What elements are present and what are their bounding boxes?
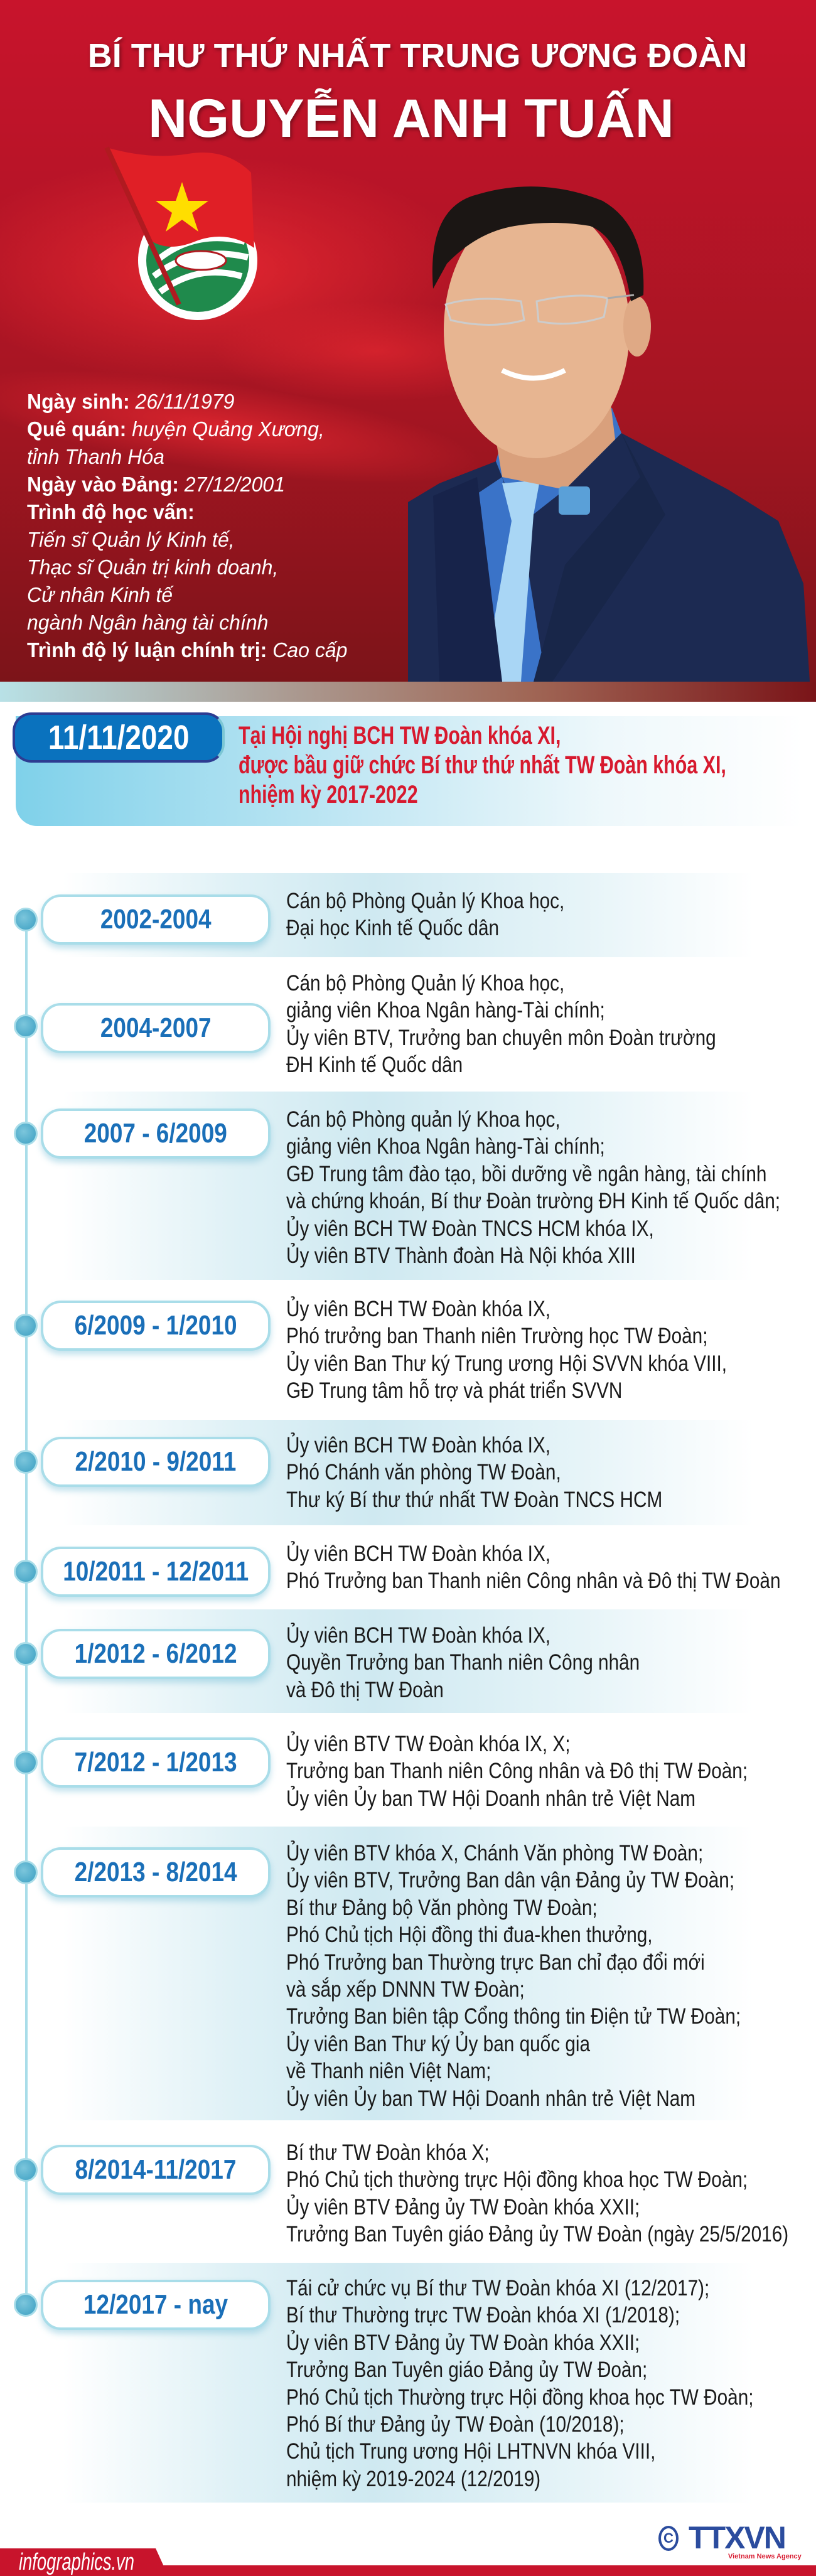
timeline entry 2/2013 - 8/2014: 2/2013 - 8/2014 <box>75 1857 237 1887</box>
timeline entry 2/2013 - 8/2014: Ủy viên BTV, Trưởng Ban dân vận Đảng ủy TW Đoàn; <box>286 1868 734 1892</box>
personal info: Ngày vào Đảng: 27/12/2001 <box>27 473 285 496</box>
timeline entry 6/2009 - 1/2010: Phó trưởng ban Thanh niên Trường học TW Đoàn; <box>286 1324 707 1348</box>
timeline entry 2/2013 - 8/2014 <box>14 1840 741 2111</box>
callout text: Tại Hội nghị BCH TW Đoàn khóa XI, <box>239 722 561 749</box>
timeline entry 7/2012 - 1/2013: Ủy viên BTV TW Đoàn khóa IX, X; <box>286 1732 570 1756</box>
portrait <box>408 186 810 682</box>
timeline entry 2007 - 6/2009 <box>14 1107 780 1268</box>
personal info: tỉnh Thanh Hóa <box>27 445 164 468</box>
timeline entry 2/2010 - 9/2011 <box>14 1432 662 1512</box>
timeline entry 8/2014-11/2017: Trưởng Ban Tuyên giáo Đảng ủy TW Đoàn (ngày 25/5/2016) <box>286 2222 788 2246</box>
timeline entry 2/2013 - 8/2014: và sắp xếp DNNN TW Đoàn; <box>286 1977 525 2002</box>
timeline entry 2004-2007: Ủy viên BTV, Trưởng ban chuyên môn Đoàn trường <box>286 1026 716 1050</box>
timeline entry 8/2014-11/2017: Phó Chủ tịch thường trực Hội đồng khoa học TW Đoàn; <box>286 2167 748 2192</box>
timeline entry 2/2013 - 8/2014: Ủy viên Ban Thư ký Ủy ban quốc gia <box>286 2032 590 2056</box>
timeline entry 2004-2007: giảng viên Khoa Ngân hàng-Tài chính; <box>286 998 605 1022</box>
timeline entry 2007 - 6/2009: và chứng khoán, Bí thư Đoàn trường ĐH Kinh tế Quốc dân; <box>286 1189 780 1213</box>
timeline entry 6/2009 - 1/2010: 6/2009 - 1/2010 <box>75 1310 237 1341</box>
timeline entry 2007 - 6/2009: 2007 - 6/2009 <box>84 1118 227 1149</box>
footer bar <box>0 2565 816 2576</box>
logo: TTXVN <box>658 2520 802 2560</box>
personal info: Trình độ học vấn: <box>27 500 195 523</box>
personal info: Cử nhân Kinh tế <box>27 583 173 606</box>
timeline entry 1/2012 - 6/2012 <box>14 1623 640 1702</box>
timeline entry 10/2011 - 12/2011: Phó Trưởng ban Thanh niên Công nhân và Đô thị TW Đoàn <box>286 1569 781 1593</box>
timeline entry 7/2012 - 1/2013: 7/2012 - 1/2013 <box>75 1747 237 1778</box>
timeline entry 1/2012 - 6/2012: Ủy viên BCH TW Đoàn khóa IX, <box>286 1623 550 1648</box>
callout: 11/11/2020 <box>13 712 726 826</box>
timeline entry 2004-2007 <box>14 971 716 1077</box>
logo: TTXVN: TTXVN <box>689 2520 785 2555</box>
timeline entry 2/2013 - 8/2014: Phó Chủ tịch Hội đồng thi đua-khen thưởng, <box>286 1923 653 1947</box>
name: NGUYỄN ANH TUẤN <box>148 89 674 149</box>
timeline entry 2007 - 6/2009: GĐ Trung tâm đào tạo, bồi dưỡng về ngân hàng, tài chính <box>286 1162 766 1186</box>
icon: youth union logo <box>104 147 257 320</box>
timeline entry 6/2009 - 1/2010: Ủy viên Ban Thư ký Trung ương Hội SVVN khóa VIII, <box>286 1351 727 1376</box>
timeline entry 2/2013 - 8/2014: Ủy viên BTV khóa X, Chánh Văn phòng TW Đoàn; <box>286 1841 703 1865</box>
personal info <box>27 390 347 662</box>
timeline entry 1/2012 - 6/2012: Quyền Trưởng ban Thanh niên Công nhân <box>286 1650 640 1675</box>
timeline entry 2002-2004: Đại học Kinh tế Quốc dân <box>286 916 499 940</box>
timeline entry 2/2013 - 8/2014: Bí thư Đảng bộ Văn phòng TW Đoàn; <box>286 1896 598 1920</box>
timeline entry 2004-2007: ĐH Kinh tế Quốc dân <box>286 1053 463 1077</box>
timeline entry 12/2017 - nay: Phó Chủ tịch Thường trực Hội đồng khoa học TW Đoàn; <box>286 2385 754 2410</box>
timeline entry 2002-2004: Cán bộ Phòng Quản lý Khoa học, <box>286 889 564 913</box>
timeline entry 6/2009 - 1/2010 <box>14 1296 727 1403</box>
footer tab: infographics.vn: infographics.vn <box>19 2549 134 2575</box>
timeline entry 1/2012 - 6/2012: 1/2012 - 6/2012 <box>75 1638 237 1669</box>
personal info: Ngày sinh: 26/11/1979 <box>27 390 234 413</box>
timeline entry 2/2013 - 8/2014: về Thanh niên Việt Nam; <box>286 2059 491 2083</box>
timeline entry 12/2017 - nay: Trưởng Ban Tuyên giáo Đảng ủy TW Đoàn; <box>286 2358 647 2382</box>
timeline entry 2002-2004: 2002-2004 <box>100 904 211 935</box>
personal info: Quê quán: huyện Quảng Xương, <box>27 417 325 441</box>
header background <box>0 0 816 682</box>
timeline entry 8/2014-11/2017: 8/2014-11/2017 <box>75 2154 236 2185</box>
personal info: Thạc sĩ Quản trị kinh doanh, <box>27 555 278 579</box>
timeline bands <box>63 873 753 957</box>
timeline entry 2/2013 - 8/2014: Phó Trưởng ban Thường trực Ban chỉ đạo đổi mới <box>286 1950 705 1975</box>
timeline entry 2/2010 - 9/2011: Thư ký Bí thư thứ nhất TW Đoàn TNCS HCM <box>286 1488 662 1512</box>
personal info: Trình độ lý luận chính trị: Cao cấp <box>27 638 347 662</box>
timeline entry 2004-2007: Cán bộ Phòng Quản lý Khoa học, <box>286 971 564 996</box>
timeline entry 7/2012 - 1/2013: Trưởng ban Thanh niên Công nhân và Đô thị TW Đoàn; <box>286 1759 748 1783</box>
timeline entry 10/2011 - 12/2011: Ủy viên BCH TW Đoàn khóa IX, <box>286 1542 550 1566</box>
timeline entry 12/2017 - nay: 12/2017 - nay <box>83 2289 228 2320</box>
timeline entry 12/2017 - nay: Ủy viên BTV Đảng ủy TW Đoàn khóa XXII; <box>286 2331 640 2355</box>
callout text <box>239 722 726 808</box>
timeline entry 2007 - 6/2009: Cán bộ Phòng quản lý Khoa học, <box>286 1107 561 1132</box>
timeline entry 12/2017 - nay: nhiệm kỳ 2019-2024 (12/2019) <box>286 2467 540 2491</box>
timeline entry 6/2009 - 1/2010: Ủy viên BCH TW Đoàn khóa IX, <box>286 1297 550 1321</box>
timeline line <box>25 920 28 2307</box>
timeline entry 12/2017 - nay <box>14 2276 754 2491</box>
timeline entry 2004-2007: 2004-2007 <box>100 1012 211 1043</box>
timeline entry 1/2012 - 6/2012: và Đô thị TW Đoàn <box>286 1678 444 1702</box>
timeline entry 2007 - 6/2009: giảng viên Khoa Ngân hàng-Tài chính; <box>286 1134 605 1159</box>
timeline entry 12/2017 - nay: Phó Bí thư Đảng ủy TW Đoàn (10/2018); <box>286 2412 625 2437</box>
personal info: Tiến sĩ Quản lý Kinh tế, <box>27 528 235 551</box>
timeline entry 6/2009 - 1/2010: GĐ Trung tâm hỗ trợ và phát triển SVVN <box>286 1378 622 1403</box>
logo: TTXVN: Vietnam News Agency <box>728 2553 802 2560</box>
timeline entry 10/2011 - 12/2011: 10/2011 - 12/2011 <box>63 1556 249 1587</box>
timeline entry 2007 - 6/2009: Ủy viên BCH TW Đoàn TNCS HCM khóa IX, <box>286 1216 654 1241</box>
timeline entry 8/2014-11/2017: Ủy viên BTV Đảng ủy TW Đoàn khóa XXII; <box>286 2195 640 2219</box>
timeline entry 2/2013 - 8/2014: Ủy viên Ủy ban TW Hội Doanh nhân trẻ Việt Nam <box>286 2086 695 2111</box>
timeline entry 12/2017 - nay: Tái cử chức vụ Bí thư TW Đoàn khóa XI (12/2017); <box>286 2276 709 2300</box>
timeline entry 2007 - 6/2009: Ủy viên BTV Thành đoàn Hà Nội khóa XIII <box>286 1243 636 1268</box>
timeline entry 8/2014-11/2017: Bí thư TW Đoàn khóa X; <box>286 2140 490 2165</box>
callout text: được bầu giữ chức Bí thư thứ nhất TW Đoàn khóa XI, <box>239 751 726 779</box>
timeline entry 2002-2004 <box>14 889 564 952</box>
footer tab: infographics.vn <box>0 2548 168 2576</box>
timeline entry 8/2014-11/2017 <box>14 2140 788 2246</box>
date pill <box>13 712 225 763</box>
timeline entry 7/2012 - 1/2013: Ủy viên Ủy ban TW Hội Doanh nhân trẻ Việt Nam <box>286 1786 695 1811</box>
personal info: ngành Ngân hàng tài chính <box>27 611 268 634</box>
timeline entry 2/2010 - 9/2011: Phó Chánh văn phòng TW Đoàn, <box>286 1460 561 1484</box>
timeline entry 2/2010 - 9/2011: Ủy viên BCH TW Đoàn khóa IX, <box>286 1433 550 1457</box>
title: BÍ THƯ THỨ NHẤT TRUNG ƯƠNG ĐOÀN <box>88 37 747 75</box>
date pill: 11/11/2020 <box>48 719 189 756</box>
timeline entry 10/2011 - 12/2011 <box>14 1541 781 1604</box>
logo: TTXVN: C <box>663 2530 674 2546</box>
callout text: nhiệm kỳ 2017-2022 <box>239 781 418 808</box>
timeline entry 12/2017 - nay: Chủ tịch Trung ương Hội LHTNVN khóa VIII, <box>286 2439 655 2464</box>
timeline entry 2/2010 - 9/2011: 2/2010 - 9/2011 <box>75 1446 236 1477</box>
timeline entry 7/2012 - 1/2013 <box>14 1731 748 1811</box>
gradient strip <box>0 682 816 702</box>
timeline entry 12/2017 - nay: Bí thư Thường trực TW Đoàn khóa XI (1/2018); <box>286 2303 680 2327</box>
timeline entry 2/2013 - 8/2014: Trưởng Ban biên tập Cổng thông tin Điện tử TW Đoàn; <box>286 2004 741 2029</box>
